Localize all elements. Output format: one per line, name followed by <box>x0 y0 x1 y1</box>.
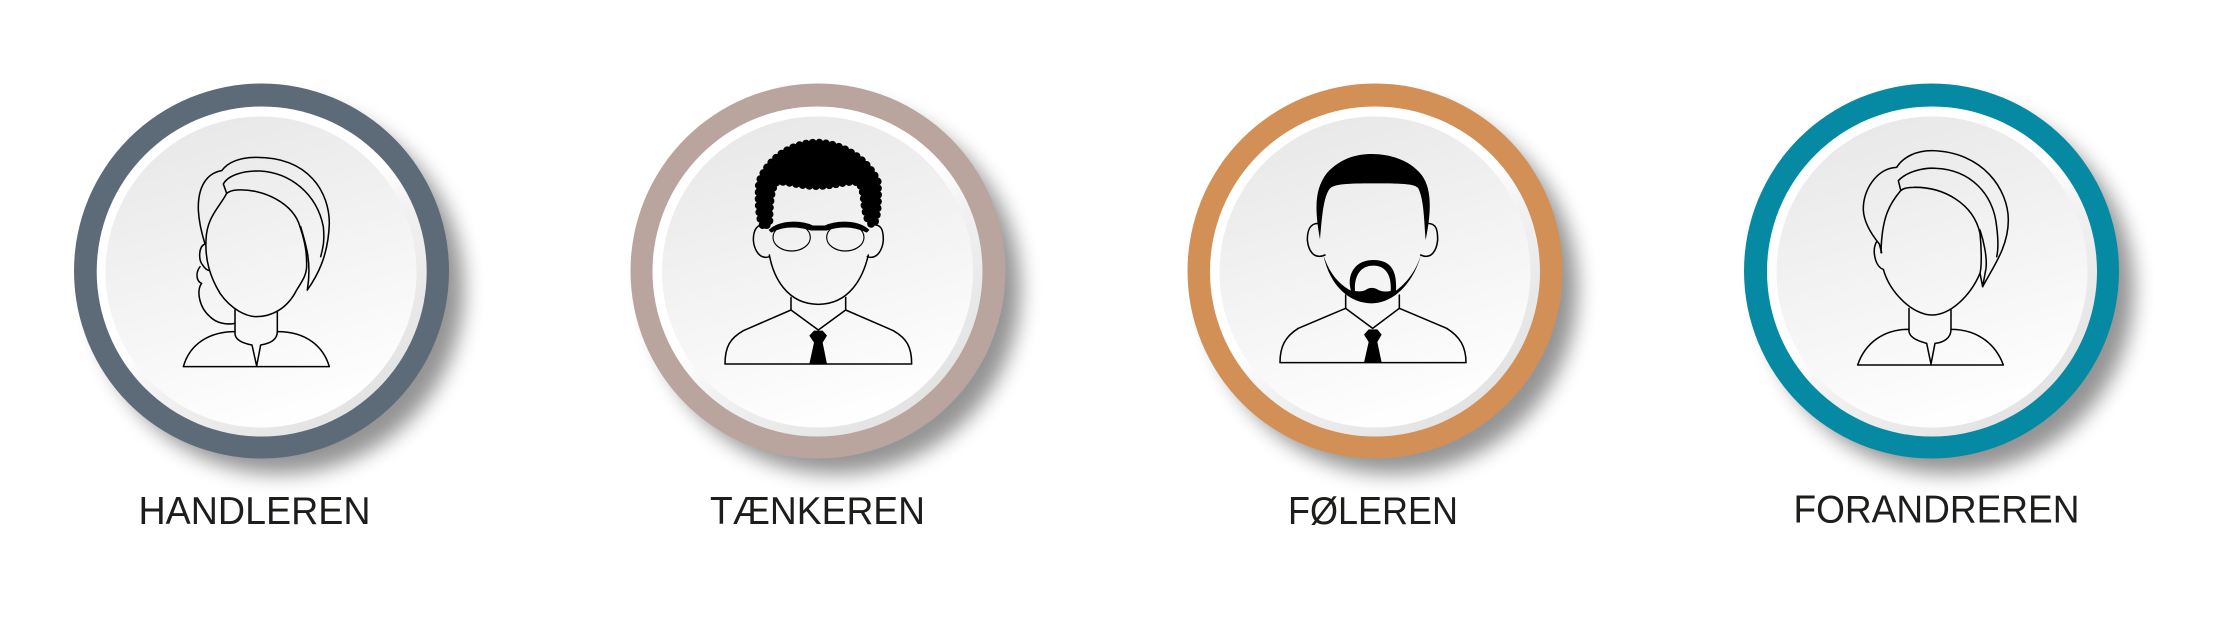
label: Handleren: HANDLEREN <box>138 490 370 533</box>
panel: Føleren <box>1188 84 1578 533</box>
panel: Forandreren <box>1744 84 2134 531</box>
panel: Tænkeren <box>630 84 1020 533</box>
badge: teal ring <box>1744 84 2134 474</box>
panel: Handleren <box>74 84 464 533</box>
label: Tænkeren: TÆNKEREN <box>710 490 925 533</box>
badge: orange ring <box>1188 84 1578 474</box>
badge: taupe ring <box>630 84 1020 474</box>
label: Føleren: FØLEREN <box>1288 490 1458 533</box>
icon: man with curly hair, glasses and tie <box>725 143 912 364</box>
icon: man with goatee and tie <box>1280 154 1466 363</box>
icon: woman with swept hair and bun <box>183 157 329 367</box>
badge: slate ring <box>74 84 464 474</box>
label: Forandreren: FORANDREREN <box>1794 488 2080 531</box>
icon: woman with voluminous swept hair <box>1858 151 2008 365</box>
